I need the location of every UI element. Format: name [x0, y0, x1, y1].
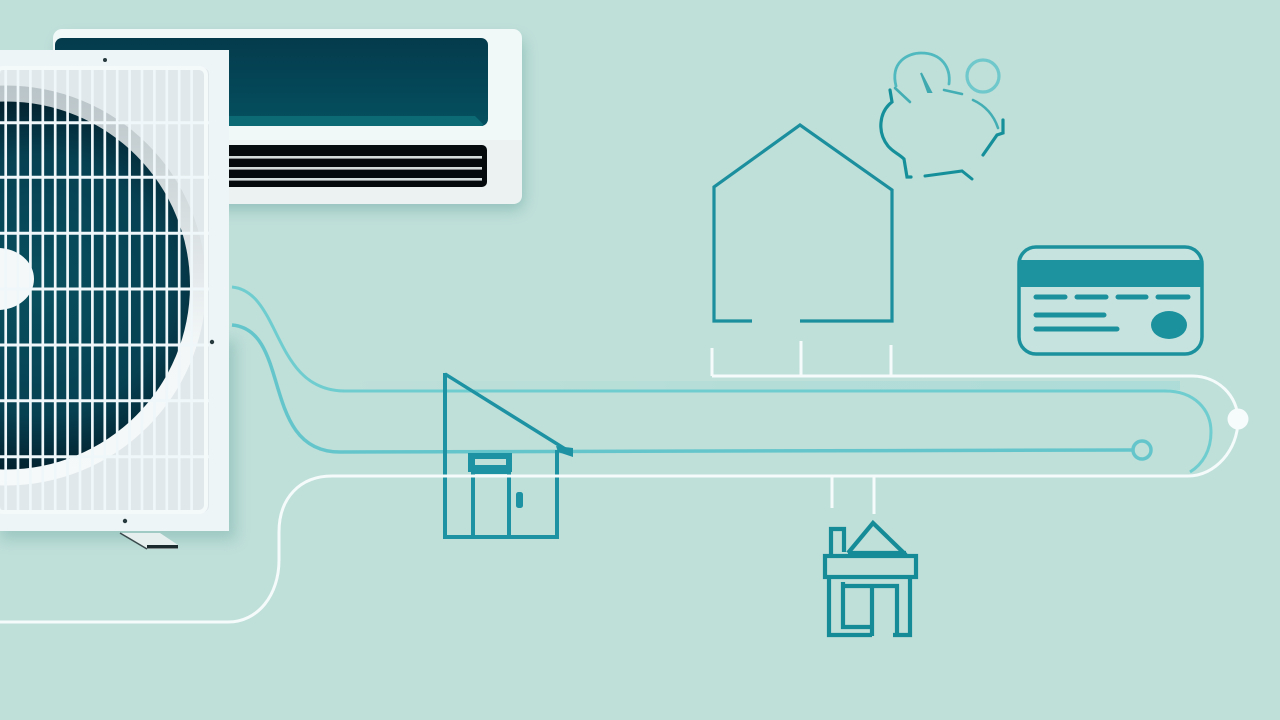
mounting foot [120, 533, 178, 549]
white connector line [0, 341, 1238, 622]
display panel [55, 38, 488, 126]
screws [103, 58, 214, 523]
fan hub [0, 248, 34, 310]
outdoor air conditioner unit [0, 50, 236, 549]
icon: piggy bank with coins [881, 53, 1003, 179]
fan shroud [0, 86, 206, 486]
icon: large house outline [714, 125, 892, 321]
teal line: upper refrigerant pipe [232, 287, 1211, 472]
icon: credit card [1019, 247, 1202, 354]
icon: small house with chimney [825, 523, 916, 636]
fan blade opening [0, 102, 190, 470]
teal line: lower refrigerant pipe [232, 325, 1151, 459]
indoor air conditioner unit [53, 29, 524, 210]
casing [0, 50, 229, 531]
protective grille [0, 68, 209, 512]
node: white dot [1228, 408, 1248, 430]
air vent [222, 145, 487, 187]
icon: small house with door [445, 373, 573, 537]
